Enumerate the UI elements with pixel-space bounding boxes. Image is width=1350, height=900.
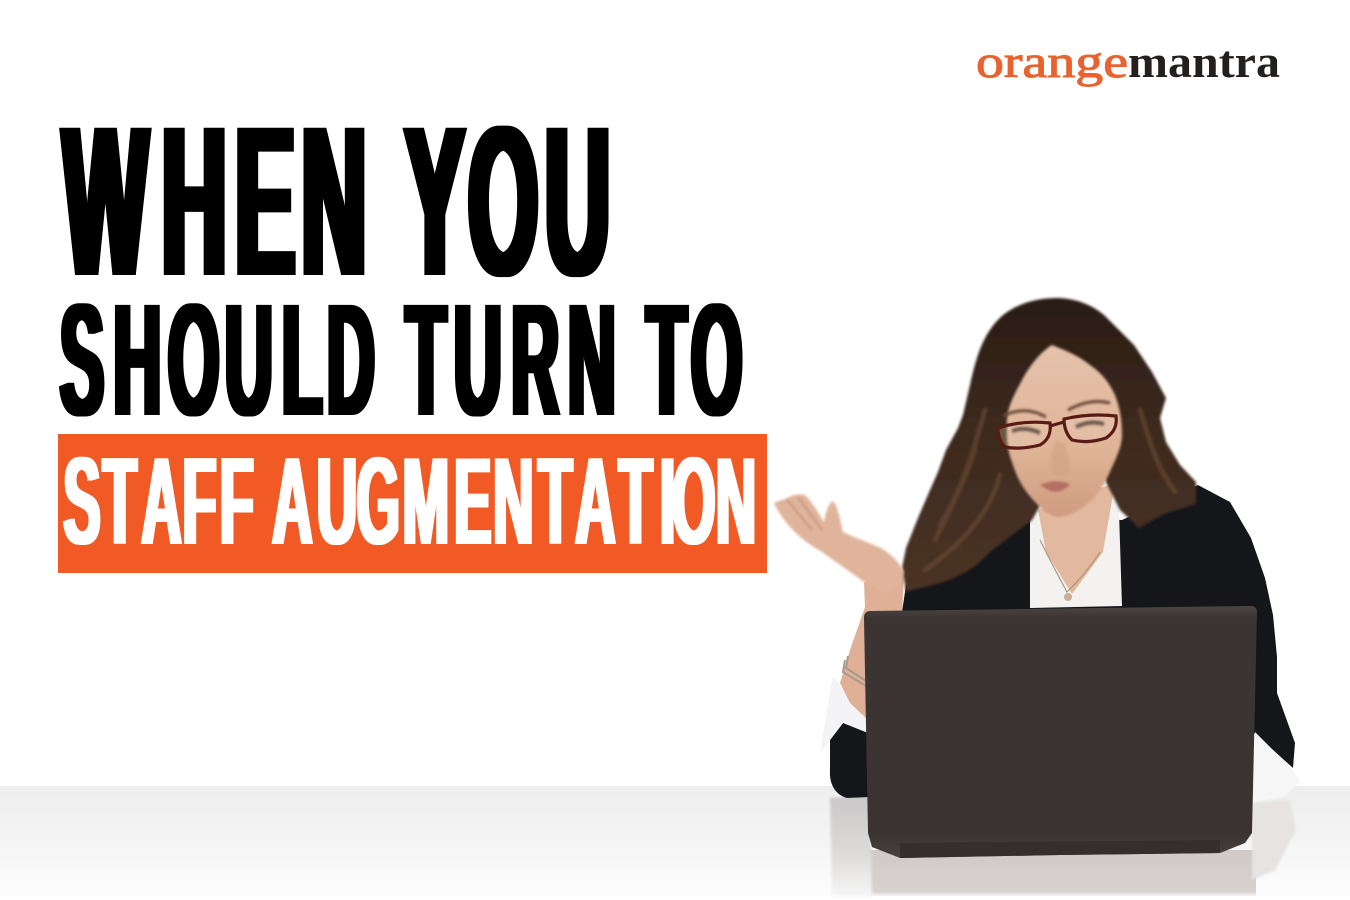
logo: mantra — [1128, 36, 1280, 87]
pendant — [1064, 593, 1072, 601]
hair highlights — [925, 410, 1175, 570]
title line 2: SHOULD TURN TO — [60, 270, 742, 449]
floor — [0, 786, 1350, 900]
mouth — [1040, 481, 1070, 492]
raised hand — [774, 494, 904, 592]
eyebrows — [1003, 402, 1110, 417]
right cuff — [1253, 732, 1300, 802]
floor reflections — [830, 796, 1296, 896]
neck and chest — [1038, 483, 1115, 594]
jacket — [902, 485, 1295, 768]
logo — [976, 36, 1280, 87]
logo: orange — [976, 36, 1128, 87]
bracelet — [843, 656, 866, 686]
glasses — [998, 415, 1116, 448]
shirt — [1030, 480, 1122, 608]
orange banner — [58, 434, 767, 573]
left cuff — [820, 675, 868, 753]
left forearm — [840, 572, 904, 720]
face — [1007, 345, 1122, 517]
necklace — [1040, 540, 1100, 592]
left sleeve — [830, 716, 870, 798]
eyes — [1012, 423, 1104, 433]
laptop — [864, 606, 1257, 858]
title line 1: WHEN YOU — [63, 81, 610, 321]
laptop hinge — [900, 840, 1220, 858]
hair — [902, 298, 1196, 592]
banner text: STAFF AUGMENTATION — [63, 433, 756, 571]
nose — [1050, 440, 1070, 476]
photo: woman at laptop — [774, 298, 1300, 896]
finger creases — [787, 497, 822, 530]
